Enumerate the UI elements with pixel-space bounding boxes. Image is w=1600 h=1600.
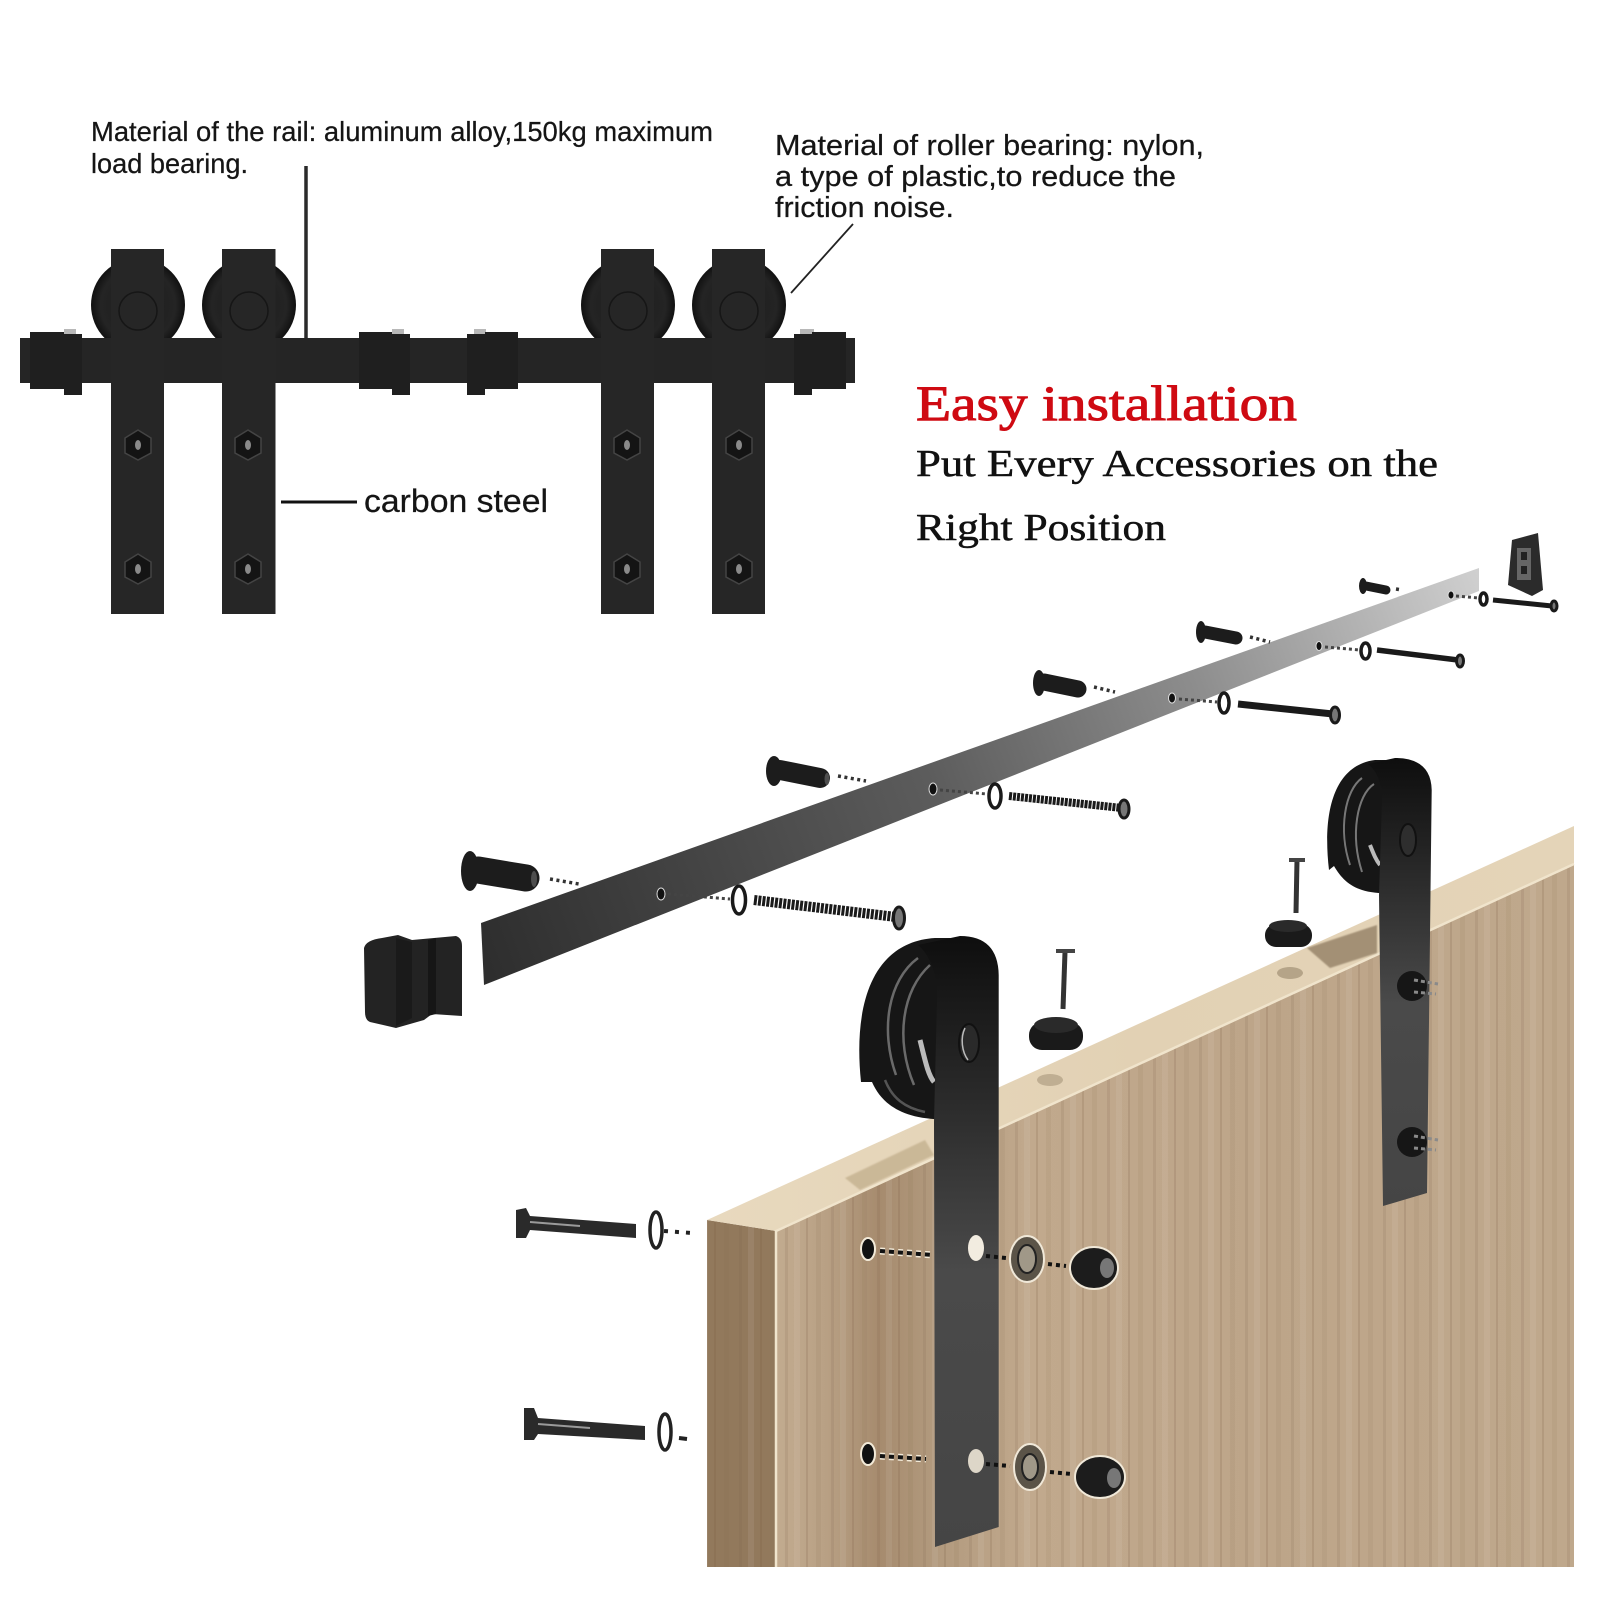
bumper and screw left: [1029, 951, 1083, 1050]
rail bar: [20, 338, 855, 383]
rail end stopper right: [1508, 533, 1543, 596]
door fasteners lower row: [861, 1443, 1125, 1498]
hanger bolts: [125, 430, 752, 584]
callout: rail material: [91, 116, 713, 179]
left hanger: [859, 936, 999, 1547]
shadows and holes on door top: [845, 1140, 934, 1190]
door bolts left: [516, 1208, 692, 1450]
axle: [959, 1024, 979, 1062]
exploded rail: [481, 568, 1479, 985]
leader line: rail: [304, 166, 308, 340]
right hanger: [1327, 758, 1438, 1206]
roller axles: [119, 292, 758, 330]
bumper and screw right: [1265, 860, 1312, 947]
subheading: [916, 443, 1438, 549]
callout: roller material: a type of plastic,to reduce the: [775, 161, 1176, 193]
front view hardware: rail and hangers: [20, 249, 855, 614]
washers: [732, 593, 1487, 914]
callout: rail material: Material of the rail: aluminum alloy,150kg maximum: [91, 116, 713, 147]
door front face: [776, 864, 1574, 1567]
subheading: Put Every Accessories on the: [916, 443, 1438, 485]
stopper highlights: [64, 329, 814, 334]
roller wheel: [1327, 760, 1395, 893]
door top surface: [707, 826, 1574, 1231]
door fasteners upper row: [861, 1235, 1118, 1289]
axle: [1400, 824, 1416, 856]
hanger straps: [111, 249, 765, 614]
rail screws: [754, 600, 1557, 929]
dotted guides from holes to washers: [668, 596, 1479, 899]
rollers: [91, 258, 786, 352]
rail stoppers: [30, 332, 846, 395]
strap: [1368, 758, 1432, 1206]
leader line: roller: [791, 224, 853, 293]
callout: roller material: friction noise.: [775, 192, 954, 224]
callout: roller material: [775, 130, 1204, 224]
rail screw holes: [657, 591, 1454, 900]
edge highlight: [776, 864, 1574, 1567]
roller wheel: [859, 938, 955, 1119]
strap: [918, 936, 999, 1547]
callout: roller material: Material of roller bearing: nylon,: [775, 130, 1204, 162]
wooden door: [707, 826, 1574, 1567]
door side edge: [707, 1220, 776, 1567]
callout: carbon steel: carbon steel: [364, 483, 548, 519]
subheading: Right Position: [916, 507, 1166, 549]
callout: rail material: load bearing.: [91, 148, 248, 179]
rail end stopper left: [364, 935, 462, 1028]
heading: easy installation: Easy installation: [916, 375, 1297, 431]
nuts: [1397, 971, 1438, 1157]
anchor bolts with dotted guide: [461, 578, 1402, 891]
